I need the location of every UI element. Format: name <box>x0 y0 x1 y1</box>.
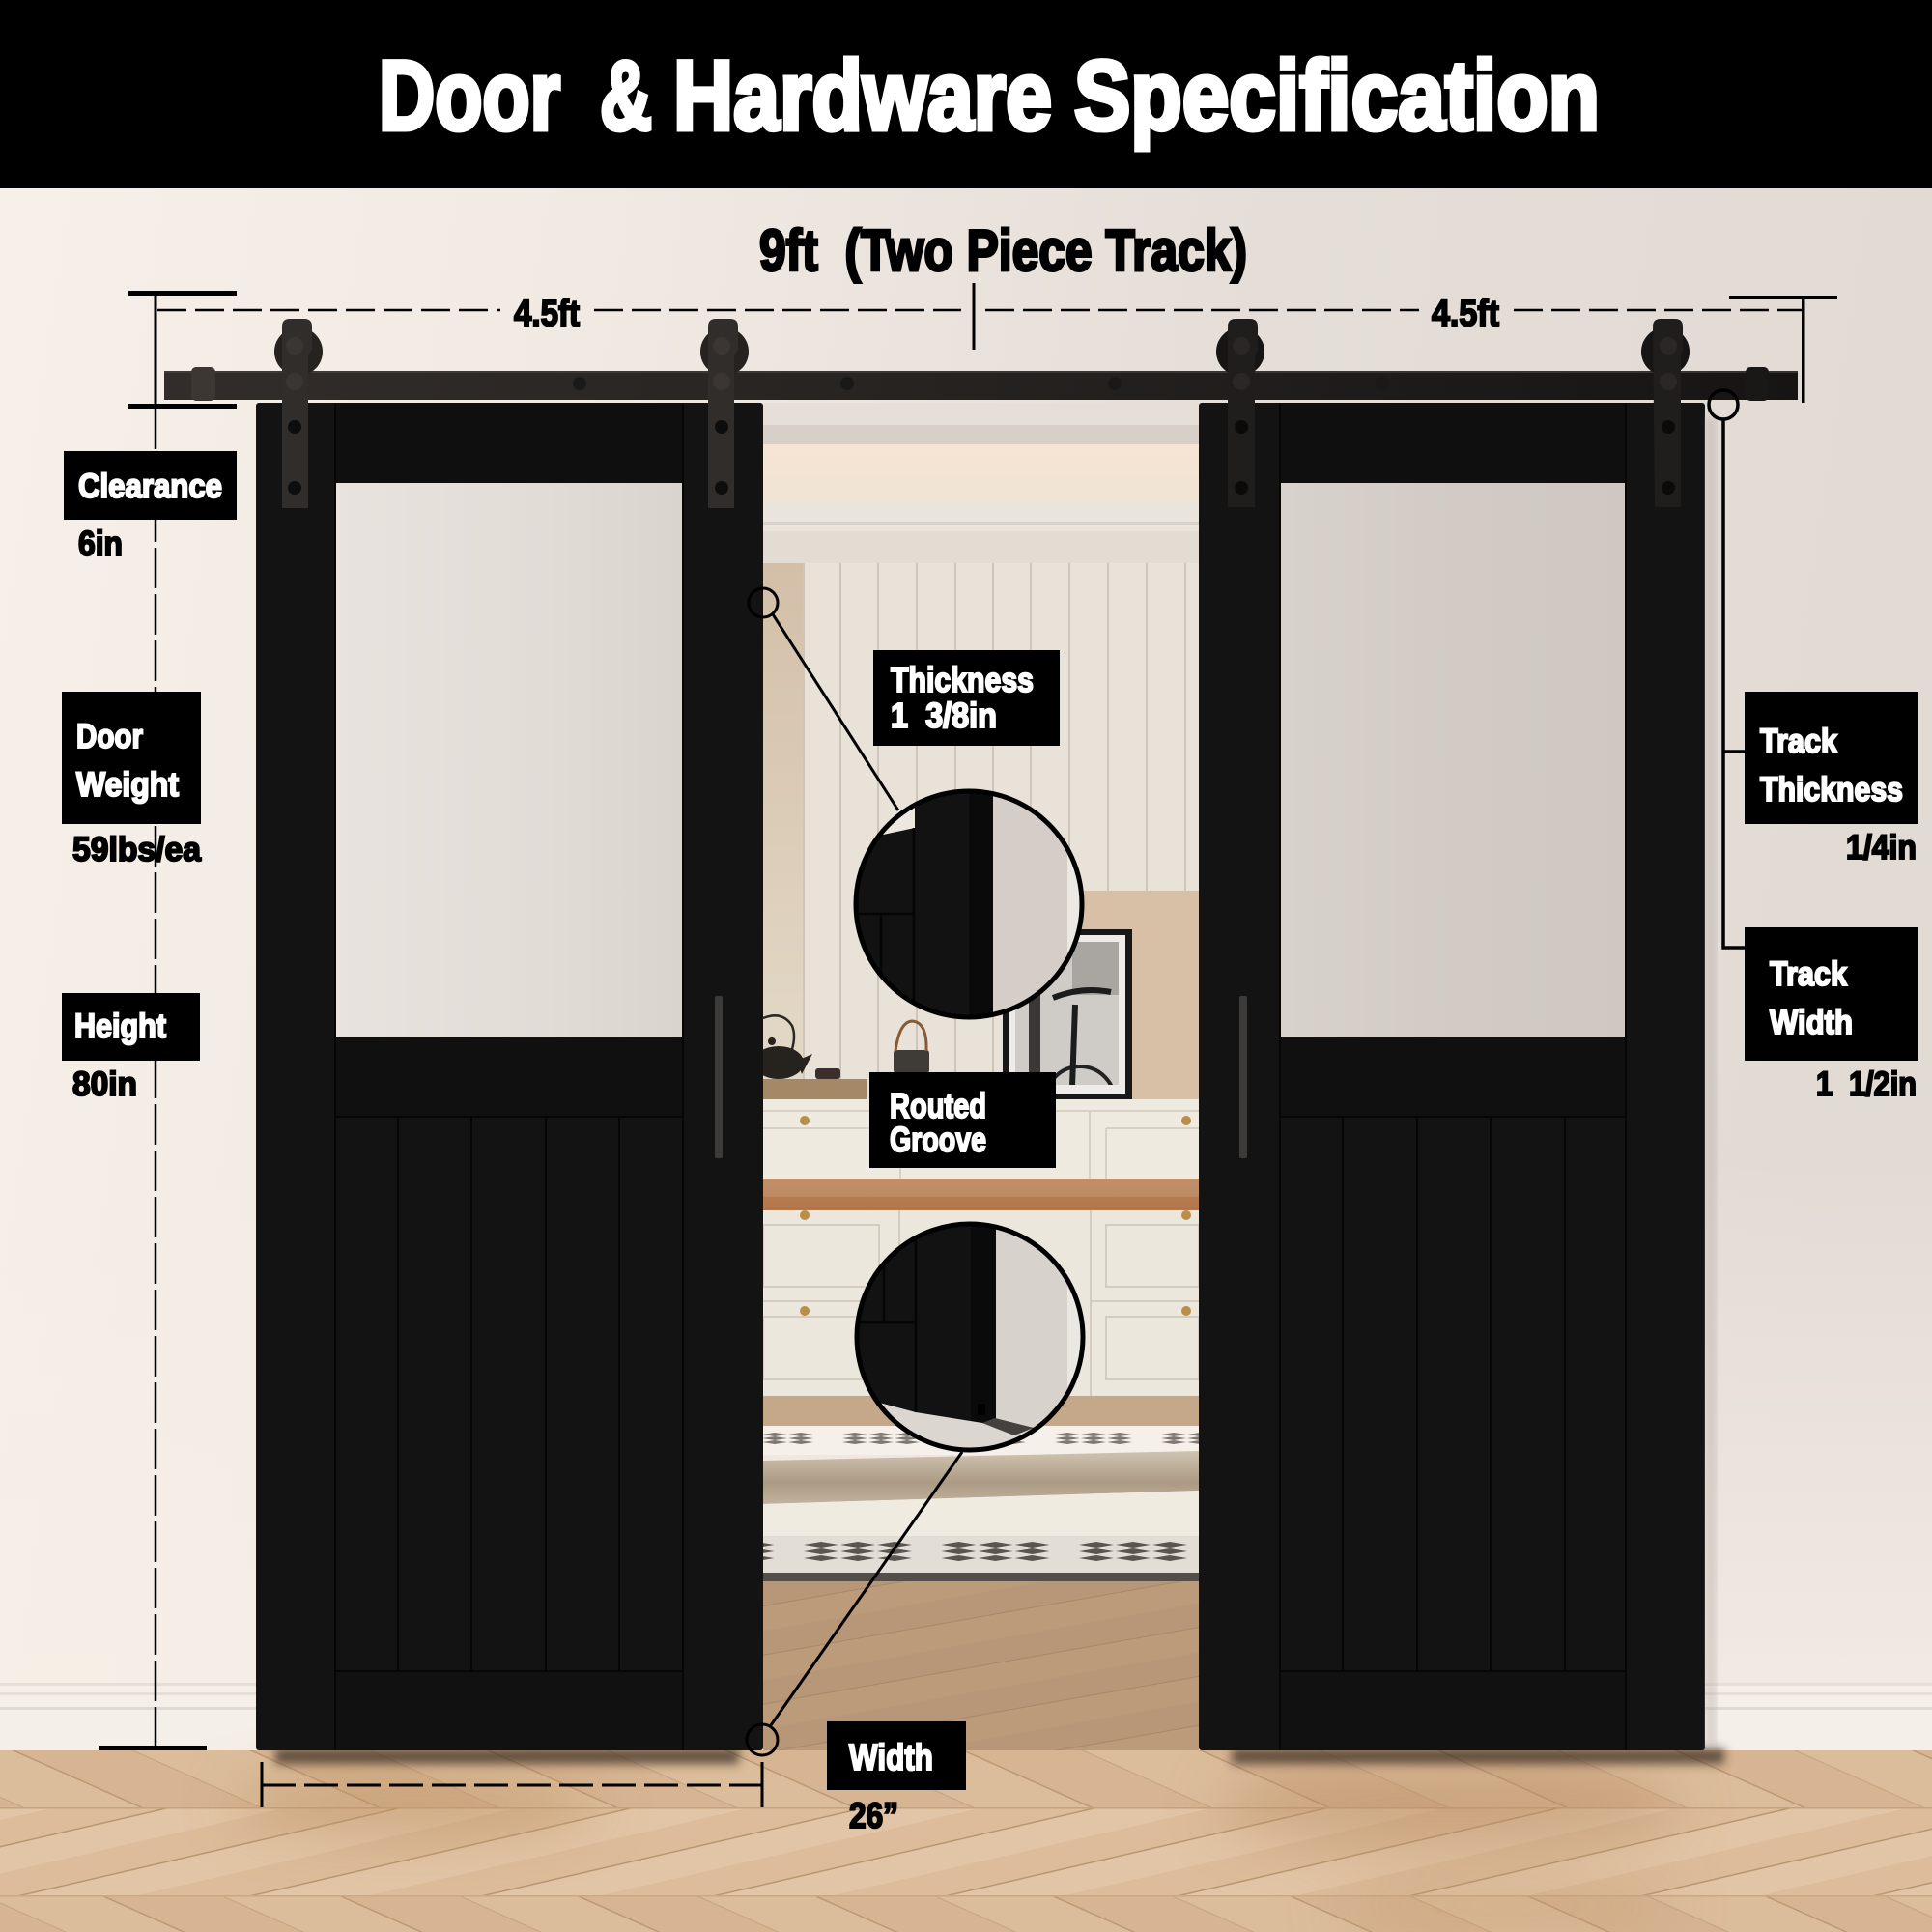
door width dimension <box>262 1762 762 1807</box>
label: height: Height <box>74 1008 166 1045</box>
detail circle: routed groove <box>854 1223 1086 1451</box>
hanger roller 1 <box>274 319 323 508</box>
label: routed groove <box>869 1072 1056 1168</box>
label: routed groove: Groove <box>890 1120 986 1159</box>
door wall shadow <box>1706 415 1716 1748</box>
left barn door <box>256 403 763 1750</box>
height value: 80in <box>72 1065 137 1103</box>
label: track thickness <box>1745 692 1918 867</box>
label: height <box>62 993 200 1103</box>
right track bracket <box>1729 296 1837 403</box>
label: width: Width <box>849 1738 933 1778</box>
label: clearance: Clearance <box>78 468 222 505</box>
title <box>379 41 1600 151</box>
leader: track dimensions <box>1709 390 1745 948</box>
track thickness value: 1/4in <box>1846 829 1917 867</box>
right door pull handle <box>1239 996 1247 1158</box>
left half length: 4.5ft <box>514 294 580 334</box>
door weight value: 59lbs/ea <box>72 831 202 868</box>
title: Specification <box>1074 41 1600 151</box>
title banner <box>0 0 1932 188</box>
door floor shadow <box>275 1748 1724 1764</box>
baseboard <box>0 1683 1932 1750</box>
teapots on shelf <box>753 1015 929 1100</box>
upper cabinets <box>763 1099 1199 1180</box>
left door rails and planks <box>335 403 683 1750</box>
hanger roller 2 <box>700 319 749 508</box>
left door glass panel <box>336 483 682 1037</box>
paneled wall <box>763 563 1199 1097</box>
wood countertop <box>763 1179 1199 1210</box>
room floor and rug <box>763 1396 1199 1750</box>
framed bicycle print <box>1003 929 1132 1099</box>
label: track width <box>1745 927 1918 1103</box>
label: width <box>827 1721 966 1835</box>
ceiling and crown moulding <box>763 403 1199 563</box>
label: track thickness: Thickness <box>1760 771 1903 809</box>
track width value: 1 1/2in <box>1816 1065 1917 1103</box>
label: thickness: Thickness <box>891 660 1034 699</box>
callout leader: thickness <box>749 588 898 810</box>
label: door weight <box>62 692 202 868</box>
track bolts <box>573 377 1389 390</box>
label: clearance <box>64 451 237 563</box>
label: door weight: Door <box>76 718 143 755</box>
track total length heading: 9ft (Two Piece Track) <box>759 218 1247 283</box>
right door glass panel <box>1280 483 1625 1037</box>
title: Hardware <box>673 41 1052 151</box>
right half length: 4.5ft <box>1432 294 1499 334</box>
label: routed groove: Routed <box>890 1086 986 1125</box>
label: track thickness: Track <box>1760 723 1837 760</box>
track dimension line <box>157 283 1803 350</box>
clearance value: 6in <box>78 524 123 563</box>
detail circle: door thickness <box>854 791 1086 1019</box>
label: track width: Track <box>1770 955 1847 993</box>
label: thickness: 1 3/8in <box>891 696 997 735</box>
right door rails and planks <box>1280 403 1626 1750</box>
right barn door <box>1199 403 1705 1750</box>
title: & <box>600 41 652 151</box>
hanger roller 4 <box>1641 319 1690 507</box>
label: track width: Width <box>1770 1004 1853 1041</box>
clearance bracket <box>99 291 237 1750</box>
label: door weight: Weight <box>76 766 179 804</box>
hanger roller 3 <box>1216 319 1264 507</box>
wooden floor <box>0 1750 1932 1932</box>
track end stops <box>191 367 1769 401</box>
width value: 26” <box>849 1796 898 1835</box>
left door pull handle <box>715 996 723 1158</box>
title: Door <box>379 41 560 151</box>
sliding track rail <box>164 367 1798 401</box>
callout leader: width and groove <box>747 1452 962 1755</box>
lower cabinets <box>763 1210 1199 1396</box>
backsplash <box>1072 891 1199 1099</box>
label: thickness <box>873 650 1060 746</box>
central room view <box>753 403 1199 1750</box>
